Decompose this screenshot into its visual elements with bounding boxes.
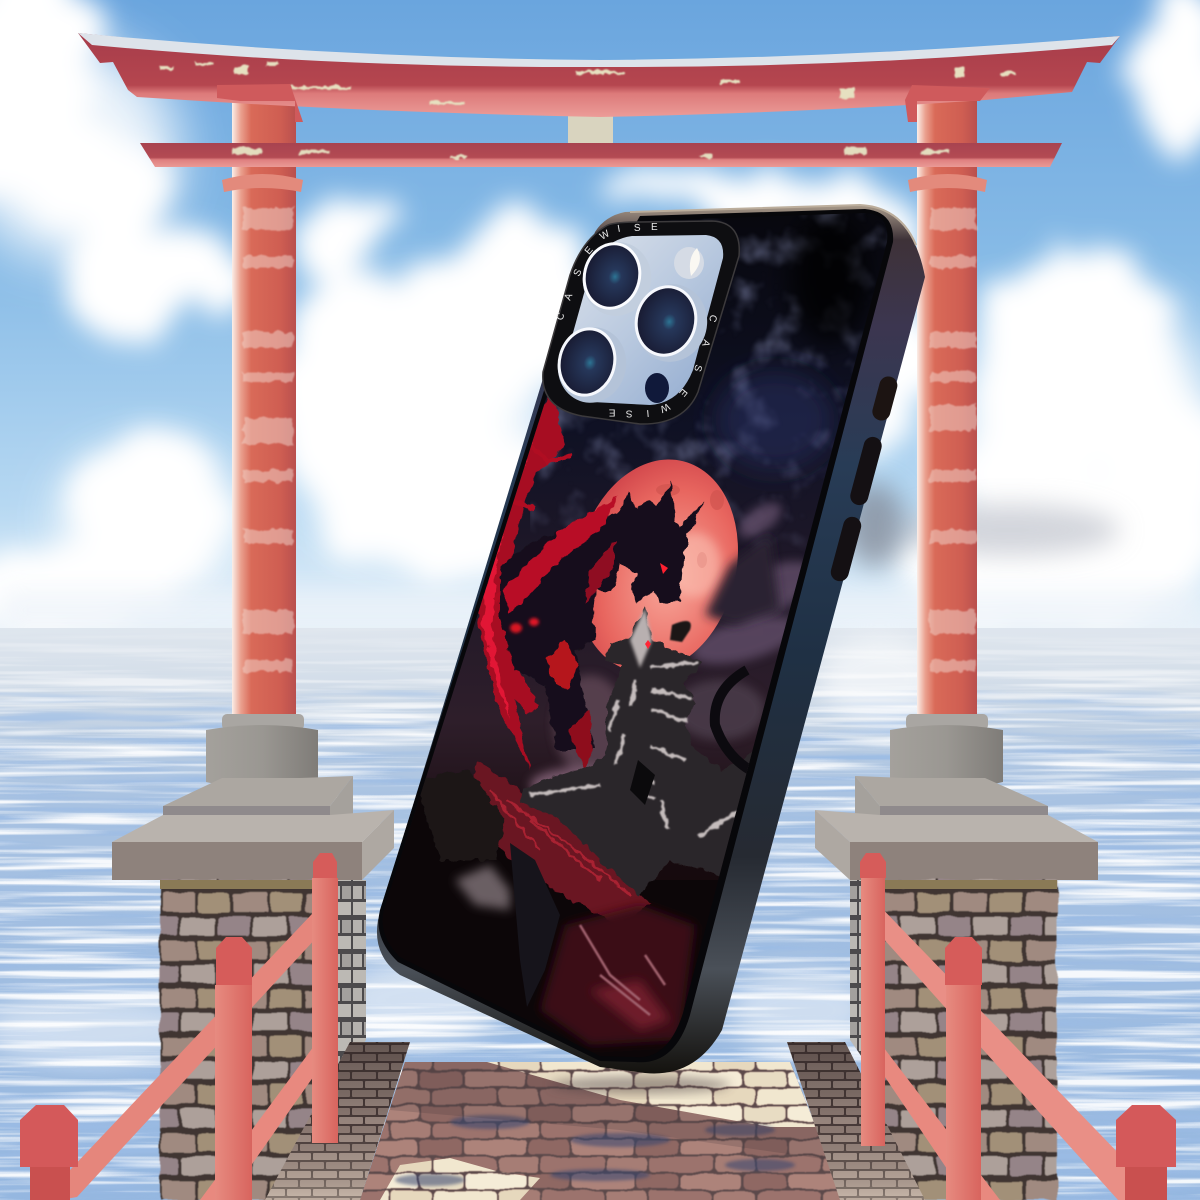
left pillar head block xyxy=(217,84,303,122)
glossy rim highlight xyxy=(630,205,916,245)
artwork xyxy=(420,213,888,1052)
left stone base xyxy=(112,714,394,1200)
sky background xyxy=(0,0,1200,630)
left railing xyxy=(20,853,338,1200)
clouds xyxy=(0,0,1200,630)
phone shadow on bridge xyxy=(550,1076,730,1094)
lidar sensor xyxy=(645,373,669,403)
inner black rim xyxy=(378,209,893,1062)
flash xyxy=(674,247,704,279)
stone bridge path xyxy=(265,1042,925,1200)
tie beam xyxy=(140,143,1062,167)
upper lens xyxy=(575,235,659,323)
side buttons xyxy=(829,374,899,583)
red wolf on the ledge xyxy=(500,480,704,770)
silver plate xyxy=(562,235,723,405)
lower lens xyxy=(550,320,634,410)
brand text: lower right: CASEWISE xyxy=(608,313,719,418)
torii gate xyxy=(78,33,1120,720)
storm clouds xyxy=(526,498,803,788)
right curb xyxy=(787,1042,925,1200)
right pillar xyxy=(908,100,987,720)
case body xyxy=(377,205,925,1073)
howling grey wolf xyxy=(520,608,757,895)
left curb xyxy=(265,1042,410,1200)
right lens xyxy=(627,276,715,370)
right railing xyxy=(860,853,1176,1200)
red tree strands xyxy=(478,390,572,770)
centre post xyxy=(568,104,613,144)
camera module xyxy=(543,221,739,424)
left pillar xyxy=(222,100,303,720)
brand text: upper left: CASEWISE xyxy=(555,222,658,322)
sea xyxy=(0,628,1200,1200)
right pillar head block xyxy=(905,85,990,122)
phone case xyxy=(370,205,925,1094)
starfield and smoke xyxy=(530,214,887,545)
blood moon xyxy=(592,460,784,668)
right stone base xyxy=(815,714,1098,1200)
camera ring xyxy=(543,221,739,424)
dark lower hill xyxy=(386,761,718,1050)
top beam xyxy=(78,33,1120,117)
